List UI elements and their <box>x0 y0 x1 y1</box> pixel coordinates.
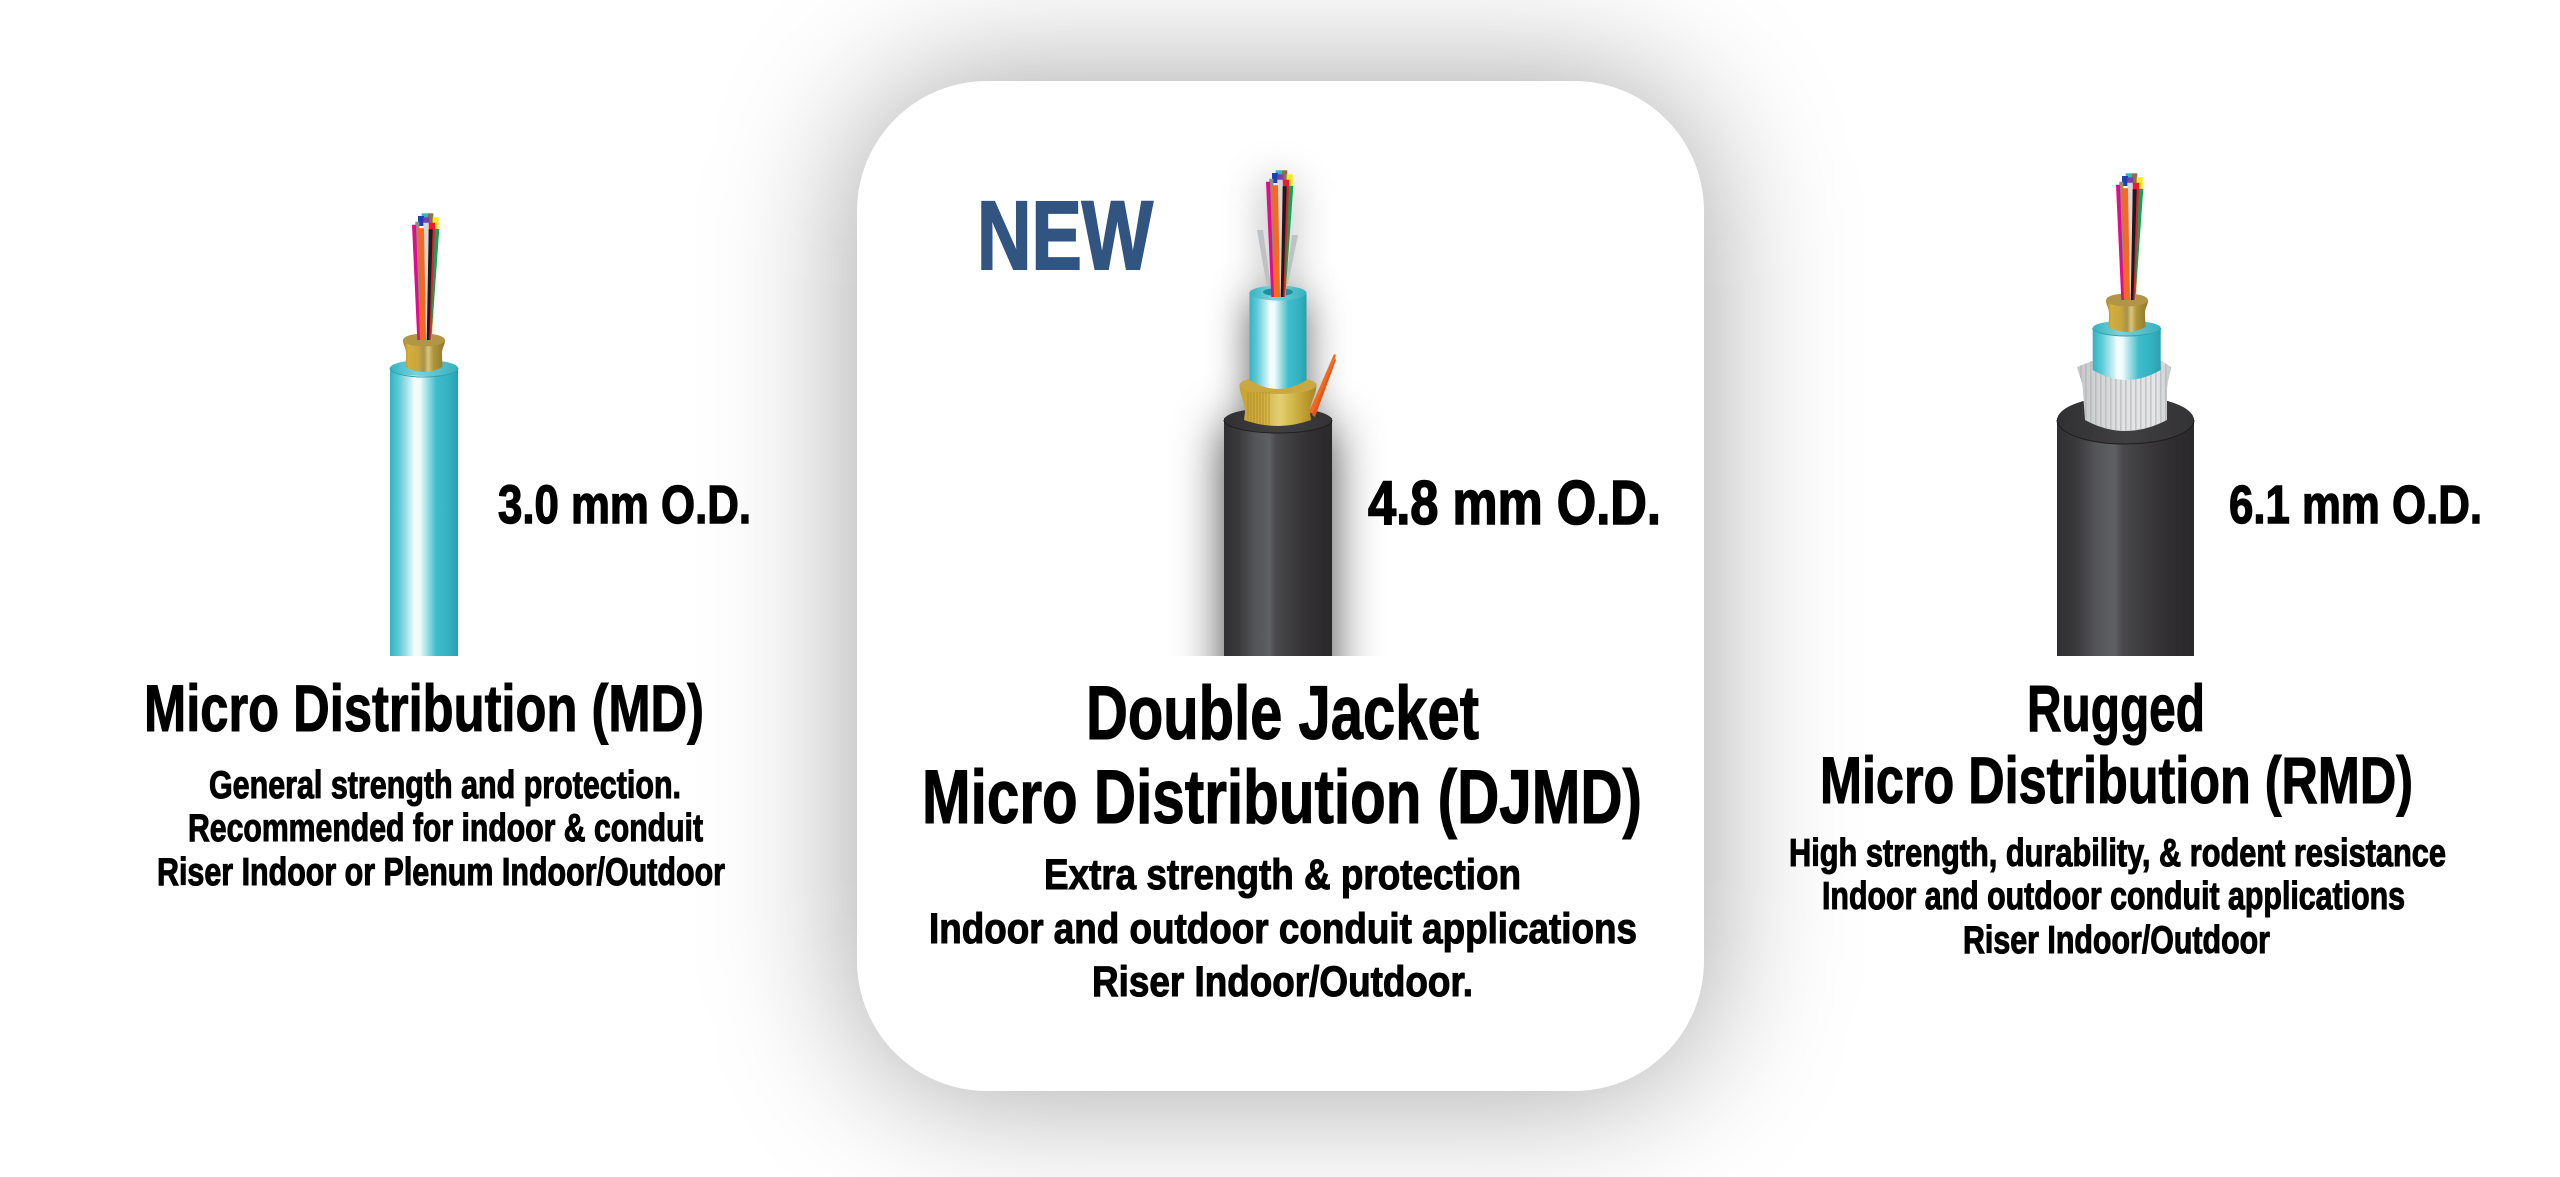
text block: DJMD description <box>922 671 1642 1006</box>
line 1: General strength and protection. <box>209 764 681 807</box>
label: 3.0 mm O.D.: 3.0 mm O.D. <box>498 475 751 535</box>
aqua jacket <box>390 360 458 656</box>
colored fibers <box>412 213 439 340</box>
text block: MD description <box>144 671 725 894</box>
gray aramid tufts <box>1257 230 1298 287</box>
line 2: Indoor and outdoor conduit applications <box>1822 875 2405 918</box>
heading line 1: Rugged: Rugged <box>2027 671 2205 745</box>
cable: Micro Distribution (MD) <box>390 213 458 656</box>
gold aramid yarn <box>403 334 445 372</box>
label: 4.8 mm O.D.: 4.8 mm O.D. <box>1368 469 1661 538</box>
heading: Micro Distribution (MD): Micro Distribution (MD) <box>144 671 704 745</box>
cable drop shadow <box>1224 180 1332 720</box>
colored fibers <box>2116 173 2143 300</box>
aqua inner jacket <box>2093 320 2161 380</box>
badge: NEW: NEW <box>977 181 1153 290</box>
line 1: Extra strength & protection <box>1044 851 1521 899</box>
cable: Double Jacket Micro Distribution (DJMD) <box>1224 170 1336 720</box>
heading line 2: Micro Distribution (DJMD): Micro Distribution (DJMD) <box>922 755 1642 840</box>
line 3: Riser Indoor or Plenum Indoor/Outdoor <box>157 851 725 894</box>
gold aramid yarn <box>2106 294 2148 332</box>
orange ripcord <box>1309 354 1336 417</box>
heading line 1: Double Jacket: Double Jacket <box>1086 671 1479 756</box>
aqua inner jacket <box>1250 286 1306 389</box>
panel: highlighted DJMD card <box>857 81 1704 1091</box>
white aramid yarn <box>2077 361 2171 431</box>
cable: Rugged Micro Distribution (RMD) <box>2057 173 2194 656</box>
label: 6.1 mm O.D.: 6.1 mm O.D. <box>2229 475 2482 535</box>
line 3: Riser Indoor/Outdoor <box>1963 919 2270 962</box>
black outer jacket <box>1224 408 1332 656</box>
text block: RMD description <box>1789 671 2446 962</box>
line 2: Recommended for indoor & conduit <box>188 807 703 850</box>
gold aramid yarn <box>1240 376 1316 426</box>
colored fibers <box>1266 170 1293 297</box>
black outer jacket <box>2057 396 2194 656</box>
line 2: Indoor and outdoor conduit applications <box>929 905 1637 953</box>
line 3: Riser Indoor/Outdoor. <box>1092 958 1473 1006</box>
